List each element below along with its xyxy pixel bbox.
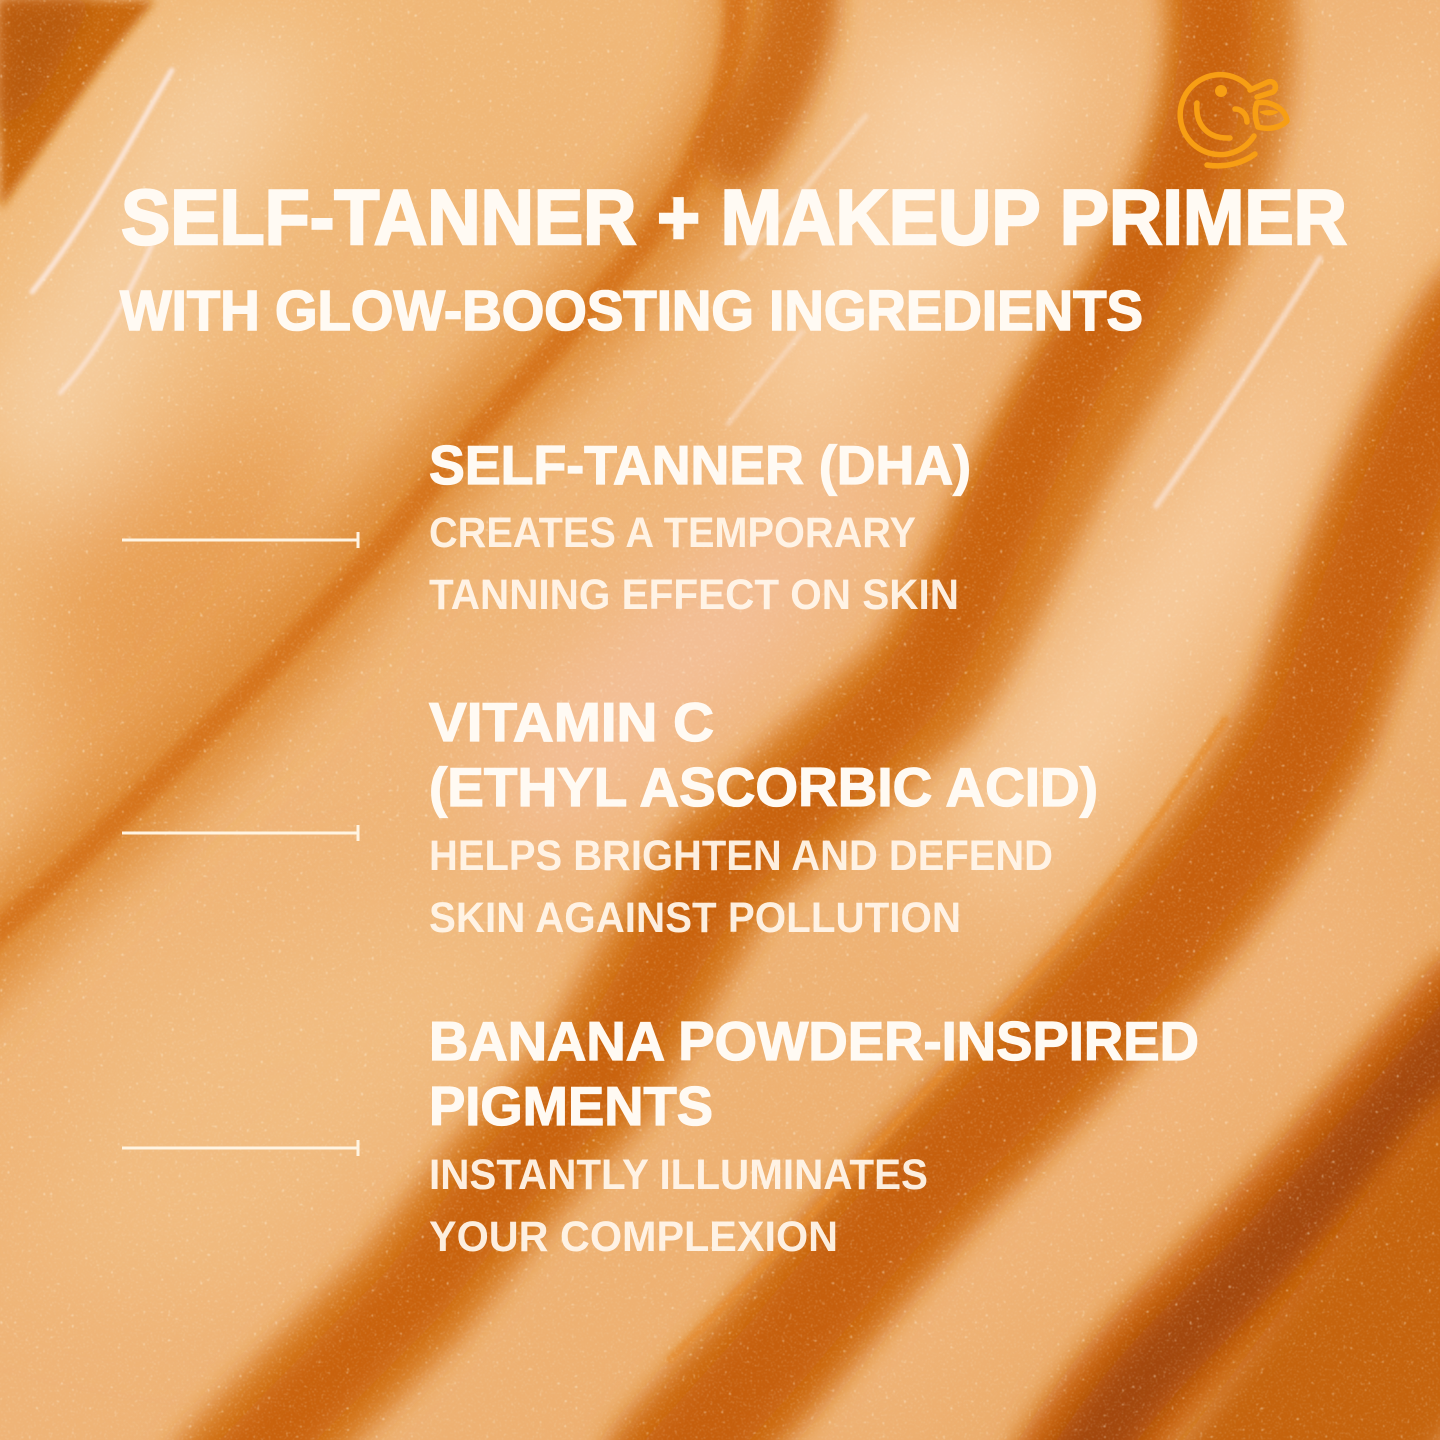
specular streaks: [32, 70, 1320, 506]
leader line: self-tanner: [122, 532, 358, 548]
heading: vitamin c: (ETHYL ASCORBIC ACID): [429, 756, 1098, 818]
band under the logo running to the bottom-left: [230, 0, 1230, 1440]
heading: vitamin c: VITAMIN C: [429, 691, 714, 753]
description: banana powder pigments: YOUR COMPLEXION: [429, 1213, 838, 1261]
icon: winking orange logo: [1180, 75, 1287, 166]
ingredient: vitamin c: [429, 691, 1098, 942]
ingredient: banana powder pigments: [429, 1010, 1199, 1261]
heading: banana powder pigments: [429, 1010, 1199, 1137]
title: SELF-TANNER + MAKEUP PRIMER: [121, 173, 1347, 261]
leader line: banana powder: [122, 1140, 358, 1156]
description: self-tanner: CREATES A TEMPORARY: [429, 509, 916, 557]
ingredient: self-tanner: [429, 434, 971, 619]
description: vitamin c: [429, 832, 1053, 942]
description: vitamin c: SKIN AGAINST POLLUTION: [429, 894, 961, 942]
description: vitamin c: HELPS BRIGHTEN AND DEFEND: [429, 832, 1053, 880]
description: banana powder pigments: INSTANTLY ILLUMINATES: [429, 1151, 928, 1199]
leader line: vitamin c: [122, 825, 358, 841]
heading: banana powder pigments: PIGMENTS: [429, 1075, 713, 1137]
heading: self-tanner: SELF-TANNER (DHA): [429, 434, 971, 496]
heading: banana powder pigments: BANANA POWDER-INSPIRED: [429, 1010, 1199, 1072]
description: self-tanner: TANNING EFFECT ON SKIN: [429, 571, 959, 619]
heading: vitamin c: [429, 691, 1098, 818]
lower-right dark band: [1070, 1010, 1440, 1440]
description: self-tanner: [429, 509, 959, 619]
band from the right edge to the bottom centre: [670, 320, 1440, 1440]
dark corner top-left: [0, 0, 155, 210]
bright orange edge lines: [670, 720, 1225, 1360]
description: banana powder pigments: [429, 1151, 928, 1261]
subtitle: WITH GLOW-BOOSTING INGREDIENTS: [120, 279, 1143, 343]
upper-middle band running to the left edge: [0, 0, 763, 985]
